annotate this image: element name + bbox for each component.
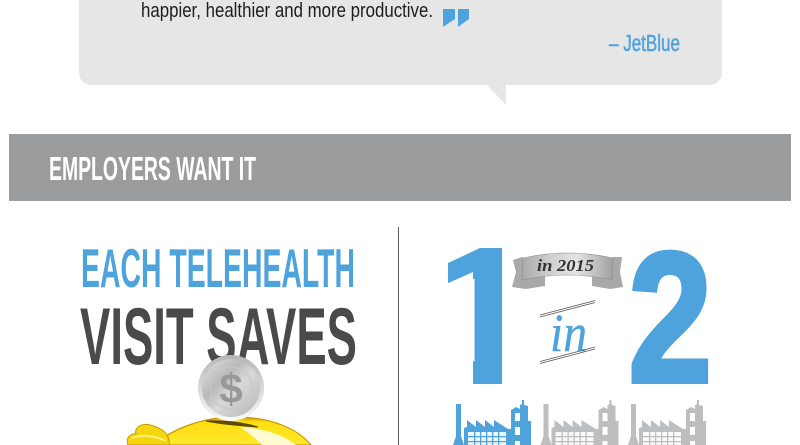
panel: one in two employers — [448, 248, 708, 445]
icon: factory highlighted blue — [453, 400, 531, 445]
icon: factory gray — [540, 400, 618, 445]
icon: silver dollar coin: $ — [219, 365, 243, 412]
icon: factory gray — [628, 400, 706, 445]
quote attribution: – JetBlue — [609, 30, 680, 56]
headline line one: EACH TELEHEALTH — [81, 237, 355, 299]
word: in: in — [550, 303, 587, 363]
panel divider — [398, 227, 399, 445]
big numeral two: 2 — [628, 214, 712, 422]
panel: telehealth savings — [80, 237, 357, 445]
panel: quote speech bubble — [79, 0, 722, 105]
icon: silver dollar coin — [198, 355, 264, 421]
big numeral one: 1 — [409, 208, 576, 425]
icon: gold piggy bank — [127, 417, 311, 445]
section heading bar — [9, 134, 791, 201]
quote text: happier, healthier and more productive. — [141, 0, 433, 22]
ribbon banner: in 2015 — [512, 253, 623, 289]
headline line two: VISIT SAVES — [80, 292, 357, 382]
icon: closing quotation marks — [443, 9, 469, 27]
ribbon banner: in 2015: in 2015 — [537, 256, 595, 275]
heading text: EMPLOYERS WANT IT — [49, 150, 256, 187]
